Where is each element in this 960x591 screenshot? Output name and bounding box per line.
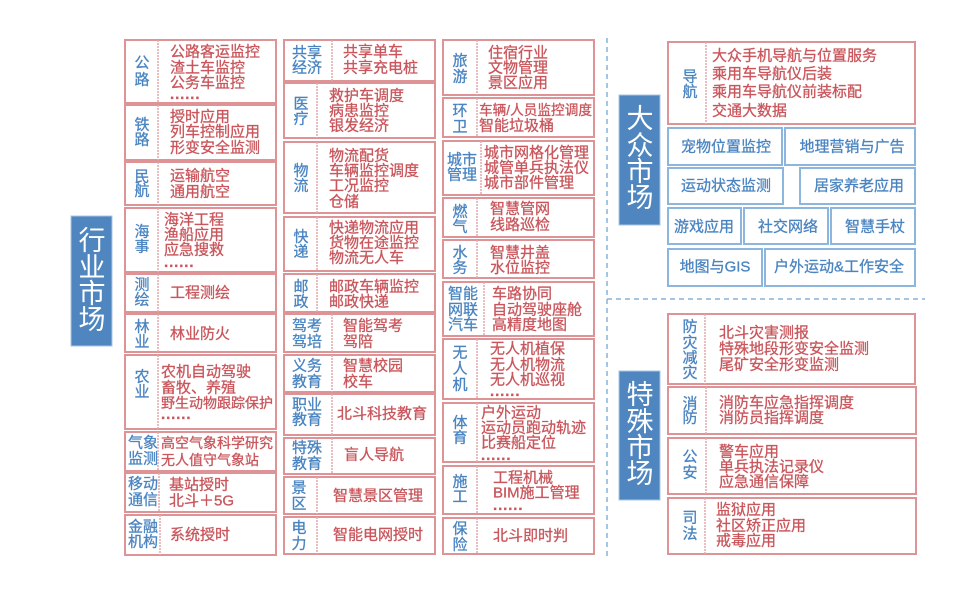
label: 水务: 水 <box>452 244 468 262</box>
panel: 公安 <box>668 438 916 494</box>
items: 共享经济: 共享充电桩 <box>343 60 418 76</box>
items: 旅游: 文物管理 <box>488 60 548 76</box>
items: 司法: 社区矫正应用 <box>716 516 806 534</box>
tag: 社交网络: 社交网络 <box>758 218 818 236</box>
items: 体育: 户外运动 <box>481 404 541 422</box>
label: 旅游: 游 <box>452 68 468 86</box>
panel: 驾考驾培 <box>284 314 435 352</box>
items: 金融机构: 系统授时 <box>170 526 230 544</box>
items: 移动通信: 北斗＋5G <box>169 492 234 510</box>
label: 民航: 民 <box>134 168 150 186</box>
label: 水务 <box>452 244 468 276</box>
panel: 无人机 <box>443 339 594 400</box>
items: 测绘: 工程测绘 <box>170 284 230 302</box>
items: 公路: ...... <box>170 86 200 103</box>
items: 施工: ...... <box>493 497 523 514</box>
items: 无人机: ...... <box>490 383 520 400</box>
label: 铁路: 铁 <box>134 116 150 134</box>
heading: 特殊市场: 场 <box>626 459 654 489</box>
label: 防灾减灾: 防 <box>682 318 698 336</box>
items: 民航: 运输航空 <box>170 168 230 184</box>
label: 快递 <box>293 228 309 260</box>
items: 快递: 快递物流应用 <box>329 218 419 236</box>
label: 金融机构: 机构 <box>128 534 158 550</box>
label: 燃气: 气 <box>452 218 468 236</box>
label: 农业: 农 <box>134 368 150 386</box>
label: 公安: 公 <box>682 448 698 466</box>
panel: 测绘 <box>125 274 276 312</box>
label: 体育 <box>452 414 468 446</box>
items: 民航 <box>170 168 230 200</box>
items: 景区: 智慧景区管理 <box>333 486 423 504</box>
heading: 行业市场: 行 <box>78 226 106 256</box>
label: 邮政: 政 <box>293 294 309 310</box>
items: 无人机: 无人机物流 <box>490 356 565 374</box>
items: 农业: 农机自动驾驶 <box>161 364 251 380</box>
items: 农业: 野生动物跟踪保护 <box>161 395 273 411</box>
label: 职业教育 <box>292 396 322 428</box>
label: 无人机: 机 <box>452 376 468 394</box>
label: 气象监测 <box>128 434 158 468</box>
items: 邮政 <box>329 278 419 310</box>
label: 林业 <box>134 318 150 350</box>
items: 海事: 渔船应用 <box>164 226 224 244</box>
label: 无人机: 人 <box>452 360 468 378</box>
panel: 水务 <box>443 240 594 278</box>
panel: 智能网联汽车 <box>443 282 594 336</box>
panel: 体育 <box>443 403 594 464</box>
label: 导航 <box>682 68 698 100</box>
panel: 移动通信 <box>125 473 276 512</box>
label: 体育: 育 <box>452 430 468 446</box>
panel: 旅游 <box>443 40 594 95</box>
items: 公安: 单兵执法记录仪 <box>719 458 824 476</box>
items: 燃气: 线路巡检 <box>490 216 550 234</box>
items: 共享经济: 共享单车 <box>343 44 403 60</box>
tag: 户外运动&工作安全: 户外运动&工作安全 <box>774 258 904 276</box>
items: 公安 <box>719 442 824 490</box>
label: 驾考驾培: 驾培 <box>292 334 322 350</box>
label: 移动通信: 移动 <box>128 476 158 492</box>
tag: 地图与GIS: 地图与GIS <box>680 258 750 276</box>
label: 公路 <box>134 54 150 88</box>
heading: 行业市场: 市 <box>78 279 106 309</box>
tag: 游戏应用 <box>668 208 741 244</box>
items: 燃气 <box>490 200 550 234</box>
items: 燃气: 智慧管网 <box>490 200 550 218</box>
label: 驾考驾培: 驾考 <box>292 318 322 334</box>
label: 电力 <box>291 520 307 552</box>
items: 海事: ...... <box>164 254 194 271</box>
label: 电力: 电 <box>291 520 307 536</box>
items: 公安: 警车应用 <box>719 442 779 460</box>
items: 城市管理: 城市部件管理 <box>484 174 574 192</box>
tag: 运动状态监测 <box>668 168 783 204</box>
items: 智能网联汽车: 自动驾驶座舱 <box>492 302 582 318</box>
items: 消防 <box>719 394 854 426</box>
items: 铁路: 授时应用 <box>170 108 230 126</box>
label: 城市管理 <box>447 152 477 184</box>
label: 义务教育 <box>292 358 322 390</box>
label: 特殊教育: 特殊 <box>292 440 322 456</box>
tag: 社交网络 <box>744 208 828 244</box>
items: 导航 <box>712 48 877 120</box>
label: 共享经济: 共享 <box>292 44 322 62</box>
items: 体育: 比赛船定位 <box>481 434 556 452</box>
label: 共享经济 <box>292 44 322 76</box>
tag: 地图与GIS <box>668 249 762 286</box>
items: 职业教育: 北斗科技教育 <box>337 406 427 422</box>
tag: 户外运动&工作安全 <box>765 249 915 286</box>
panel: 景区 <box>284 477 435 514</box>
label: 智能网联汽车: 智能 <box>448 284 478 302</box>
items: 保险: 北斗即时判 <box>493 528 568 544</box>
items: 移动通信: 基站授时 <box>169 476 229 494</box>
label: 民航 <box>134 168 150 200</box>
label: 海事: 海 <box>134 224 150 240</box>
items: 水务 <box>490 244 550 276</box>
heading: 行业市场: 场 <box>78 305 106 335</box>
items: 城市管理: 城管单兵执法仪 <box>484 160 589 176</box>
items: 防灾减灾: 北斗灾害测报 <box>719 324 809 342</box>
items: 农业: ...... <box>161 406 191 423</box>
items: 驾考驾培: 智能驾考 <box>343 316 403 334</box>
items: 智能网联汽车 <box>492 286 582 334</box>
label: 气象监测: 气象 <box>128 434 158 452</box>
label: 海事: 事 <box>134 238 150 256</box>
items: 体育: ...... <box>481 447 511 464</box>
label: 旅游 <box>452 52 468 86</box>
label: 农业: 业 <box>134 384 150 400</box>
tag: 地理营销与广告: 地理营销与广告 <box>799 138 905 156</box>
items: 环卫: 智能垃圾桶 <box>479 116 554 134</box>
panel: 物流 <box>284 142 435 213</box>
items: 铁路: 形变安全监测 <box>170 138 260 156</box>
panel: 海事 <box>125 208 276 272</box>
label: 海事 <box>134 224 150 256</box>
items: 司法: 戒毒应用 <box>716 532 776 550</box>
items: 物流: 仓储 <box>329 194 359 210</box>
label: 施工: 施 <box>452 474 468 490</box>
label: 特殊教育 <box>292 440 322 472</box>
label: 旅游: 旅 <box>452 52 468 70</box>
items: 义务教育 <box>343 356 403 390</box>
label: 邮政: 邮 <box>293 278 309 296</box>
items: 邮政: 邮政车辆监控 <box>329 278 419 296</box>
items: 旅游: 景区应用 <box>488 74 548 92</box>
items: 无人机: 无人机植保 <box>490 340 565 358</box>
label: 防灾减灾: 灾 <box>682 364 698 382</box>
label: 景区: 区 <box>291 496 307 512</box>
label: 城市管理: 城市 <box>447 152 477 168</box>
items: 医疗: 救护车调度 <box>329 88 404 104</box>
panel: 电力 <box>284 517 435 554</box>
items: 体育 <box>481 404 586 464</box>
label: 城市管理: 管理 <box>447 166 477 184</box>
label: 义务教育: 义务 <box>292 358 322 374</box>
label: 消防: 防 <box>682 410 698 426</box>
label: 共享经济: 经济 <box>292 60 322 76</box>
label: 防灾减灾: 灾 <box>682 334 698 352</box>
label: 燃气 <box>452 202 468 236</box>
label: 司法: 司 <box>682 510 698 526</box>
items: 城市管理: 城市网格化管理 <box>484 144 589 162</box>
label: 测绘: 绘 <box>134 292 150 308</box>
label: 快递: 递 <box>293 244 309 260</box>
items: 防灾减灾: 尾矿安全形变监测 <box>719 356 839 374</box>
items: 气象监测 <box>161 435 273 468</box>
tag: 居家养老应用 <box>800 168 915 204</box>
label: 测绘: 测 <box>134 276 150 294</box>
label: 农业 <box>134 368 150 400</box>
label: 景区: 景 <box>291 480 307 496</box>
heading: 大众市场: 场 <box>626 183 654 213</box>
heading: 特殊市场: 特 <box>626 380 654 410</box>
items: 特殊教育: 盲人导航 <box>344 446 404 464</box>
label: 保险 <box>452 520 468 554</box>
heading: 大众市场: 众 <box>626 131 654 161</box>
items: 体育: 运动员跑动轨迹 <box>481 420 586 436</box>
items: 义务教育: 智慧校园 <box>343 356 403 374</box>
label: 林业: 林 <box>134 318 150 336</box>
items: 医疗 <box>329 88 404 134</box>
heading: 行业市场 <box>71 216 112 346</box>
items: 智能网联汽车: 车路协同 <box>492 286 552 302</box>
items: 旅游 <box>488 44 548 92</box>
items: 民航: 通用航空 <box>170 184 230 200</box>
panel: 司法 <box>668 498 916 554</box>
label: 防灾减灾: 减 <box>682 350 698 366</box>
items: 邮政: 邮政快递 <box>329 294 389 310</box>
label: 物流 <box>293 162 309 194</box>
items: 气象监测: 无人值守气象站 <box>161 452 259 468</box>
label: 燃气: 燃 <box>452 202 468 220</box>
items: 医疗: 病患监控 <box>329 102 389 120</box>
panel: 环卫 <box>443 98 594 137</box>
items: 快递 <box>329 218 419 266</box>
heading: 大众市场 <box>619 95 660 225</box>
label: 气象监测: 监测 <box>128 450 158 468</box>
label: 施工 <box>452 474 468 506</box>
panel: 职业教育 <box>284 394 435 435</box>
items: 消防: 消防车应急指挥调度 <box>719 394 854 412</box>
label: 环卫: 环 <box>452 102 468 120</box>
label: 物流: 物 <box>293 162 309 180</box>
items: 铁路: 列车控制应用 <box>170 122 260 140</box>
label: 林业: 业 <box>134 334 150 350</box>
label: 公安 <box>682 448 698 482</box>
tag: 游戏应用: 游戏应用 <box>674 218 734 236</box>
label: 电力: 力 <box>291 536 307 552</box>
label: 测绘 <box>134 276 150 308</box>
label: 防灾减灾 <box>682 318 698 382</box>
panel: 快递 <box>284 217 435 271</box>
label: 民航: 航 <box>134 182 150 200</box>
items: 公安: 应急通信保障 <box>719 472 809 490</box>
panel: 林业 <box>125 314 276 352</box>
heading: 大众市场: 市 <box>626 157 654 187</box>
tag: 地理营销与广告 <box>785 128 915 165</box>
tag: 智慧手杖 <box>831 208 915 244</box>
panel: 城市管理 <box>443 141 594 195</box>
items: 无人机: 无人机巡视 <box>490 372 565 388</box>
items: 电力: 智能电网授时 <box>333 526 423 544</box>
items: 防灾减灾 <box>719 324 869 374</box>
label: 水务: 务 <box>452 260 468 276</box>
panel: 民航 <box>125 162 276 205</box>
label: 环卫 <box>452 102 468 136</box>
items: 公路: 公路客运监控 <box>170 44 260 60</box>
items: 物流: 物流配货 <box>329 148 389 164</box>
panel: 铁路 <box>125 105 276 160</box>
items: 林业: 林业防火 <box>170 326 230 342</box>
heading: 大众市场: 大 <box>626 104 654 134</box>
label: 医疗: 医 <box>293 96 309 112</box>
panel: 义务教育 <box>284 355 435 392</box>
label: 义务教育: 教育 <box>292 374 322 390</box>
panel: 共享经济 <box>284 40 435 81</box>
items: 公路: 渣土车监控 <box>170 60 245 76</box>
items: 义务教育: 校车 <box>343 374 373 390</box>
items: 导航: 大众手机导航与位置服务 <box>712 48 877 64</box>
label: 体育: 体 <box>452 414 468 432</box>
label: 无人机 <box>452 344 468 394</box>
label: 保险: 险 <box>452 536 468 554</box>
items: 消防: 消防员指挥调度 <box>719 410 824 426</box>
label: 司法 <box>682 510 698 542</box>
items: 导航: 乘用车导航仪前装标配 <box>712 84 862 100</box>
items: 施工 <box>493 470 580 514</box>
panel: 农业 <box>125 355 276 429</box>
items: 环卫 <box>479 102 592 134</box>
items: 气象监测: 高空气象科学研究 <box>161 435 273 451</box>
label: 公路: 路 <box>134 72 150 88</box>
label: 环卫: 卫 <box>452 118 468 136</box>
label: 铁路: 路 <box>134 132 150 148</box>
items: 无人机 <box>490 340 565 400</box>
label: 移动通信: 通信 <box>128 492 158 508</box>
tag: 智慧手杖: 智慧手杖 <box>845 218 905 236</box>
label: 智能网联汽车: 汽车 <box>448 316 478 334</box>
label: 金融机构: 金融 <box>128 518 158 536</box>
label: 职业教育: 教育 <box>292 412 322 428</box>
label: 职业教育: 职业 <box>292 396 322 414</box>
label: 无人机: 无 <box>452 344 468 362</box>
items: 海事: 海洋工程 <box>164 212 224 228</box>
items: 快递: 货物在途监控 <box>329 234 419 252</box>
label: 施工: 工 <box>452 488 468 506</box>
label: 保险: 保 <box>452 520 468 538</box>
items: 农业: 畜牧、养殖 <box>161 380 236 396</box>
label: 特殊教育: 教育 <box>292 456 322 472</box>
label: 邮政 <box>293 278 309 310</box>
tag: 宠物位置监控: 宠物位置监控 <box>681 138 771 156</box>
label: 景区 <box>291 480 307 512</box>
items: 共享经济 <box>343 44 418 76</box>
panel: 气象监测 <box>125 432 276 471</box>
heading: 行业市场: 业 <box>78 253 106 283</box>
panel: 燃气 <box>443 198 594 237</box>
items: 海事 <box>164 212 224 271</box>
items: 城市管理 <box>484 144 589 192</box>
panel: 保险 <box>443 518 594 554</box>
items: 公路 <box>170 44 260 103</box>
items: 司法: 监狱应用 <box>716 500 776 518</box>
label: 公路: 公 <box>134 54 150 72</box>
items: 医疗: 银发经济 <box>329 118 389 134</box>
items: 智能网联汽车: 高精度地图 <box>492 316 567 334</box>
items: 导航: 乘用车导航仪后装 <box>712 66 832 82</box>
items: 公路: 公务车监控 <box>170 74 245 92</box>
label: 快递: 快 <box>293 228 309 246</box>
label: 消防 <box>682 396 698 426</box>
items: 快递: 物流无人车 <box>329 250 404 266</box>
heading: 特殊市场: 殊 <box>626 407 654 437</box>
items: 海事: 应急搜救 <box>164 240 224 258</box>
items: 农业 <box>161 364 273 423</box>
tag: 宠物位置监控 <box>668 128 782 165</box>
label: 导航: 航 <box>682 84 698 100</box>
label: 医疗: 疗 <box>293 110 309 128</box>
label: 移动通信 <box>128 476 158 508</box>
panel: 防灾减灾 <box>668 314 915 384</box>
panel: 医疗 <box>284 83 435 138</box>
tag: 居家养老应用: 居家养老应用 <box>814 176 904 194</box>
items: 水务: 水位监控 <box>490 260 550 276</box>
items: 水务: 智慧井盖 <box>490 244 550 262</box>
items: 施工: BIM施工管理 <box>493 484 580 502</box>
heading: 特殊市场 <box>619 371 660 500</box>
panel: 特殊教育 <box>284 438 435 474</box>
items: 物流 <box>329 148 419 210</box>
tag: 运动状态监测: 运动状态监测 <box>681 178 771 194</box>
label: 医疗 <box>293 96 309 128</box>
label: 驾考驾培 <box>292 318 322 350</box>
label: 智能网联汽车: 网联 <box>448 302 478 318</box>
heading: 特殊市场: 市 <box>626 433 654 463</box>
label: 消防: 消 <box>682 396 698 412</box>
panel: 邮政 <box>284 274 435 312</box>
panel: 施工 <box>443 466 594 514</box>
items: 铁路 <box>170 108 260 156</box>
label: 公安: 安 <box>682 464 698 482</box>
items: 司法 <box>716 500 806 550</box>
items: 施工: 工程机械 <box>493 470 553 486</box>
label: 铁路 <box>134 116 150 148</box>
items: 移动通信 <box>169 476 234 510</box>
items: 导航: 交通大数据 <box>712 102 787 120</box>
items: 旅游: 住宿行业 <box>488 44 548 62</box>
items: 防灾减灾: 特殊地段形变安全监测 <box>719 340 869 358</box>
items: 驾考驾培 <box>343 316 403 350</box>
label: 物流: 流 <box>293 178 309 194</box>
label: 金融机构 <box>128 518 158 550</box>
panel: 公路 <box>125 40 276 103</box>
items: 物流: 车辆监控调度 <box>329 162 419 180</box>
items: 驾考驾培: 驾陪 <box>343 334 373 350</box>
items: 环卫: 车辆/人员监控调度 <box>479 102 592 118</box>
label: 导航: 导 <box>682 68 698 86</box>
panel: 消防 <box>668 387 916 434</box>
panel: 导航 <box>668 42 915 124</box>
panel: 金融机构 <box>125 515 276 555</box>
label: 智能网联汽车 <box>448 284 478 334</box>
items: 物流: 工况监控 <box>329 178 389 194</box>
label: 司法: 法 <box>682 526 698 542</box>
